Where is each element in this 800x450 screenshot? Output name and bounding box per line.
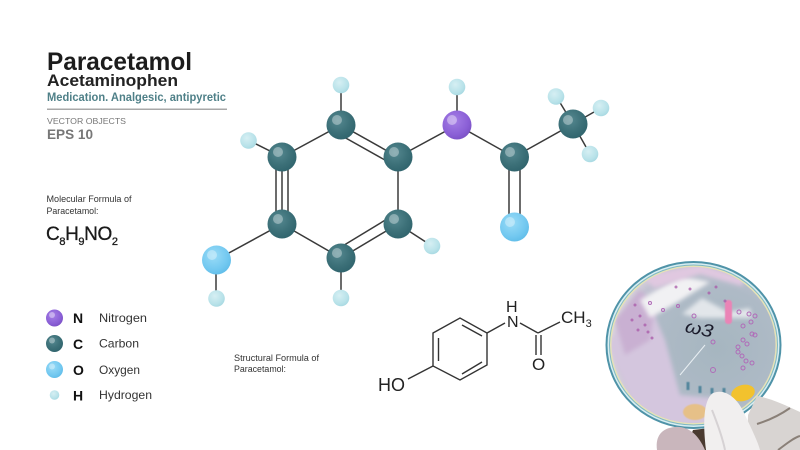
photo: petri dish held by gloved hand: [605, 260, 800, 450]
legend: oxygen: O: [73, 362, 84, 378]
legend: carbon: Carbon: [99, 336, 139, 350]
legend: [46, 310, 152, 404]
structural formula diagram: [378, 299, 592, 395]
molecular formula: 8: [59, 236, 65, 248]
oxygen atoms: [202, 212, 529, 274]
structural formula caption: Paracetamol:: [234, 364, 286, 374]
legend: oxygen: Oxygen: [99, 363, 140, 377]
molecular formula: C: [46, 224, 60, 245]
subtitle: Acetaminophen: [47, 71, 178, 90]
structural formula caption: [234, 353, 320, 374]
molecular formula: NO: [84, 224, 112, 245]
nitrogen atom: [442, 110, 472, 140]
molecular formula: 2: [112, 236, 118, 248]
legend: nitrogen: N: [73, 310, 83, 326]
title: Paracetamol: [47, 48, 192, 76]
structural formula caption: Structural Formula of: [234, 353, 320, 363]
structural formula diagram: CH: [561, 308, 586, 327]
title block: [47, 48, 227, 142]
legend: carbon: C: [73, 336, 83, 352]
divider rule: [47, 108, 227, 110]
hydrogen atoms: [208, 77, 609, 307]
skeletal bonds: [408, 318, 560, 380]
molecular formula block: [46, 194, 132, 248]
legend: nitrogen: [46, 310, 147, 326]
legend: hydrogen: H: [73, 388, 83, 404]
culture streaks at the base: [688, 382, 724, 394]
gloved hand: [657, 392, 800, 450]
molecular formula: H: [65, 224, 79, 245]
bonds: [216, 85, 601, 298]
petri dish rim: [606, 262, 780, 428]
vector objects label: VECTOR OBJECTS: [47, 116, 126, 126]
legend: oxygen: [46, 361, 140, 378]
orange reflection: [683, 404, 707, 420]
structural formula diagram: O: [532, 355, 545, 374]
EPS label: EPS 10: [47, 126, 93, 142]
molecular formula caption: Molecular Formula of: [46, 194, 132, 205]
legend: nitrogen: Nitrogen: [99, 311, 147, 325]
petri dish agar: [612, 267, 776, 423]
legend: carbon: [46, 335, 139, 352]
3D ball and stick molecule: [202, 77, 609, 307]
tagline: Medication. Analgesic, antipyretic: [47, 90, 226, 104]
carbon atoms: [268, 110, 588, 272]
molecular formula: 9: [78, 236, 85, 248]
structural formula diagram: 3: [586, 318, 592, 330]
legend: hydrogen: Hydrogen: [99, 388, 152, 402]
legend: hydrogen: [50, 388, 152, 404]
yellow tab: [729, 382, 757, 404]
structural formula diagram: H: [506, 299, 518, 316]
atom labels: HO: [378, 375, 405, 395]
handwritten dish label: ω3: [683, 316, 715, 342]
structural formula diagram: N: [507, 314, 519, 331]
molecular formula block: Paracetamol:: [46, 206, 98, 217]
scratch line: [680, 345, 705, 375]
